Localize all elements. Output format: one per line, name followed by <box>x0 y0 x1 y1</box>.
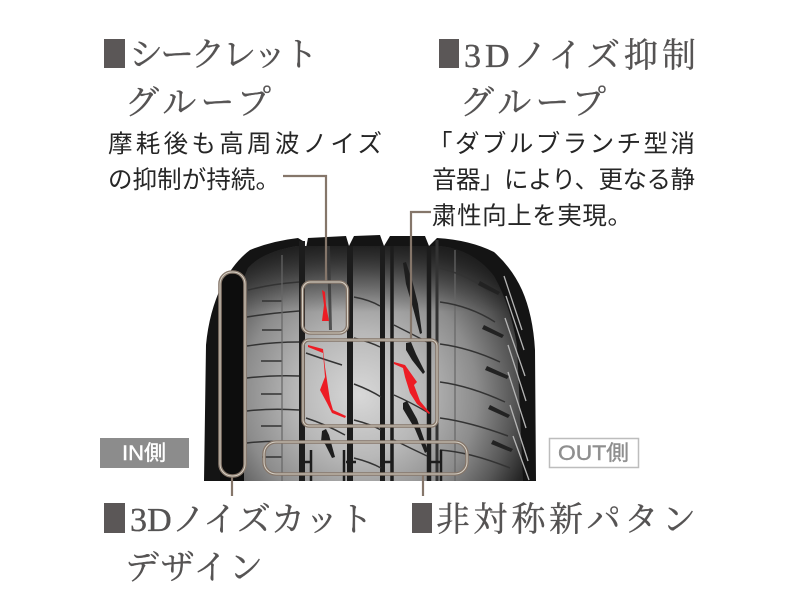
shoulder shading at top <box>244 246 496 308</box>
label: OUT side <box>550 438 638 468</box>
heading: 3D noise cut design: 3Dノイズカット <box>130 502 373 539</box>
red silencer: secret groove <box>322 290 329 321</box>
heading: 3D noise cut design <box>104 502 373 587</box>
callout: 3D noise group frame and leader <box>303 212 437 426</box>
label: IN side <box>100 438 189 468</box>
callout: asymmetric pattern oval and leader <box>264 442 467 496</box>
callout: secret group frame and leader <box>283 176 348 333</box>
label: IN side: IN側 <box>122 442 166 465</box>
text: secret group description: の抑制が持続。 <box>108 166 280 194</box>
sipes and lateral lines <box>247 246 513 481</box>
left sidewall noise-cut block <box>220 272 244 481</box>
text: 3D noise suppression description <box>428 130 695 230</box>
heading: 3D noise suppression group <box>439 37 696 122</box>
heading: asymmetric new pattern: 非対称新パタン <box>436 501 696 539</box>
main grooves <box>302 240 437 481</box>
heading: 3D noise suppression group: 3Dノイズ抑制 <box>464 37 696 75</box>
callout: 3D noise cut oval and leader <box>220 272 245 496</box>
text: 3D noise suppression description: 粛性向上を実現。 <box>432 202 632 230</box>
heading: secret group: グループ <box>125 85 271 122</box>
heading: secret group: シークレット <box>129 37 318 74</box>
tread surface <box>226 246 523 481</box>
text: secret group description: 摩耗後も高周波ノイズ <box>108 130 382 158</box>
heading: 3D noise suppression group: グループ <box>460 85 606 122</box>
text: 3D noise suppression description: 「ダブルブランチ型消 <box>428 130 695 158</box>
tire illustration <box>204 235 536 481</box>
heading: secret group <box>104 37 318 122</box>
H-shaped groove bars <box>299 450 442 481</box>
tire silhouette <box>204 235 536 481</box>
red silencer: double branch left <box>308 345 346 418</box>
heading: 3D noise cut design: デザイン <box>125 550 263 587</box>
red silencer: double branch right <box>394 362 430 414</box>
text: 3D noise suppression description: 音器」により、更なる静 <box>432 166 695 194</box>
right sidewall chevrons <box>504 276 529 480</box>
text: secret group description <box>108 130 382 194</box>
label: OUT side: OUT側 <box>558 442 629 465</box>
